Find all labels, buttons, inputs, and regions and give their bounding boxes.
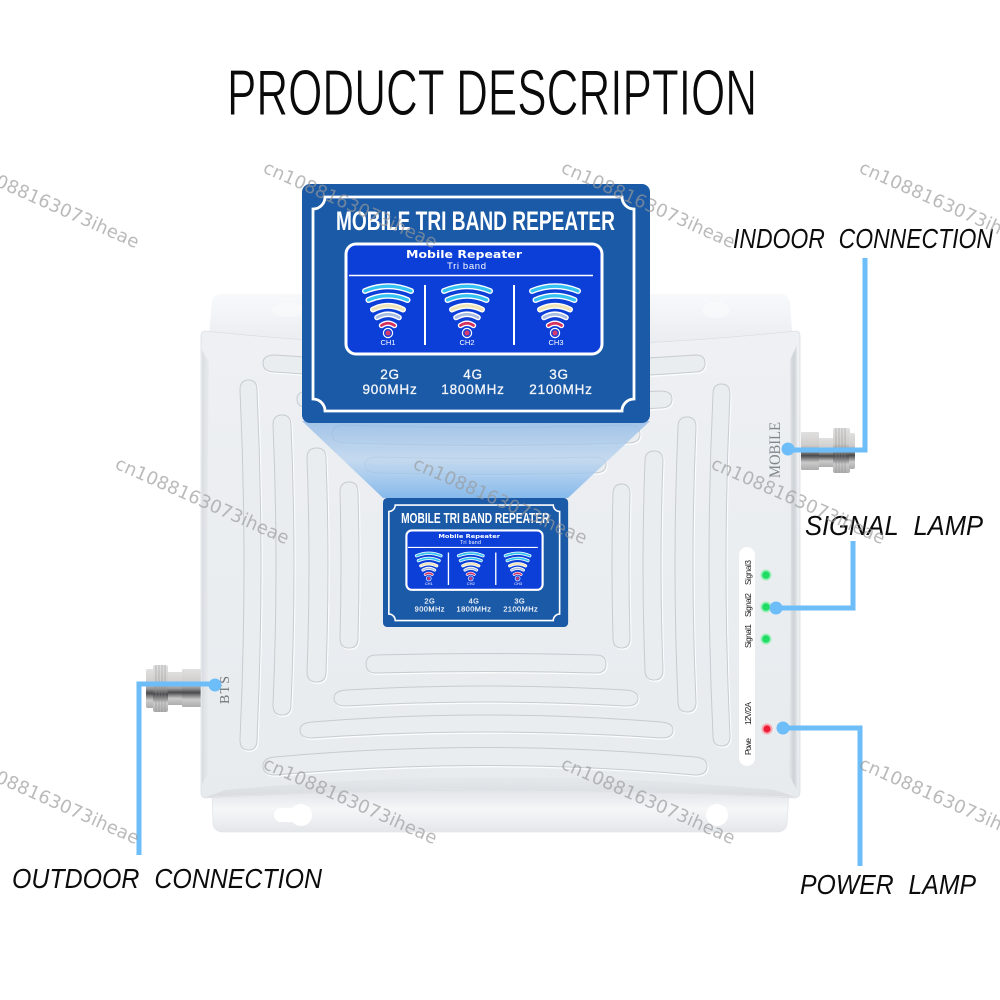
watermarks: cn1088163073iheae bbox=[260, 157, 440, 253]
signal icon: CH1 bbox=[365, 286, 411, 338]
callout: signal lamp bbox=[770, 510, 983, 614]
watermarks bbox=[0, 157, 1000, 849]
signal icon: CH2 bbox=[444, 286, 490, 338]
LCD panel: Mobile Repeater bbox=[406, 249, 523, 261]
LCD panel: CH1 bbox=[380, 338, 396, 347]
bottom mounting flange bbox=[212, 790, 789, 832]
LCD panel: Tri band bbox=[447, 261, 486, 272]
band frequencies: 900MHz bbox=[362, 382, 418, 397]
LED labels: Signal1 bbox=[744, 624, 753, 648]
device label card: Tri band bbox=[460, 540, 481, 546]
card heading: MOBILE TRI BAND REPEATER bbox=[336, 206, 615, 236]
watermarks: cn1088163073iheae bbox=[558, 157, 738, 253]
port label: MOBILE: MOBILE bbox=[767, 422, 784, 478]
band frequencies: 1800MHz bbox=[441, 382, 505, 397]
port label: BTS: BTS bbox=[218, 676, 233, 704]
device label card: 1800MHz bbox=[457, 604, 491, 613]
watermarks: cn1088163073iheae bbox=[708, 453, 888, 549]
LED labels: Signal2 bbox=[744, 593, 753, 617]
band frequencies: 2100MHz bbox=[529, 382, 593, 397]
LCD panel: CH3 bbox=[548, 338, 564, 347]
callout: outdoor connection bbox=[12, 678, 323, 894]
zoom beam between label cards bbox=[302, 421, 650, 498]
LCD panel: CH2 bbox=[459, 338, 475, 347]
side bevels bbox=[789, 345, 797, 790]
device label card: 4G bbox=[469, 596, 479, 605]
device label card: 2100MHz bbox=[503, 604, 538, 613]
band frequencies: 4G bbox=[463, 367, 483, 382]
enlarged label card bbox=[302, 184, 650, 423]
device label card: 2G bbox=[424, 596, 435, 605]
label: power lamp: POWER LAMP bbox=[800, 869, 976, 900]
watermarks: cn1088163073iheae bbox=[260, 753, 440, 849]
pressed ridges bbox=[240, 355, 731, 776]
LED labels: Signal3 bbox=[744, 560, 753, 585]
device label card: 3G bbox=[514, 596, 525, 605]
device label card: CH3 bbox=[514, 581, 523, 586]
device label card: Mobile Repeater bbox=[438, 534, 500, 540]
card frame bbox=[313, 197, 634, 411]
device label card bbox=[383, 498, 568, 627]
repeater device body bbox=[201, 294, 800, 832]
mounting holes bbox=[272, 302, 730, 826]
device label card: CH1 bbox=[425, 581, 433, 586]
main plate bbox=[201, 331, 800, 798]
device label card: MOBILE TRI BAND REPEATER bbox=[401, 511, 550, 527]
band frequencies: 3G bbox=[549, 367, 569, 382]
device label card: 900MHz bbox=[415, 604, 445, 613]
callout: power lamp bbox=[776, 722, 976, 900]
device label card: CH2 bbox=[467, 581, 476, 586]
label: outdoor connection: OUTDOOR CONNECTION bbox=[12, 863, 323, 894]
LCD panel bbox=[346, 244, 602, 354]
watermarks: cn1088163073iheae bbox=[558, 753, 738, 849]
connector: indoor bbox=[801, 428, 855, 473]
callout: indoor connection bbox=[733, 223, 994, 456]
watermarks: cn1088163073iheae bbox=[112, 453, 292, 549]
LED labels bbox=[744, 560, 753, 755]
label: signal lamp: SIGNAL LAMP bbox=[805, 510, 983, 541]
LED labels: Powe bbox=[744, 738, 753, 755]
LEDs bbox=[760, 570, 772, 734]
watermarks: cn1088163073iheae bbox=[410, 453, 590, 549]
title: PRODUCT DESCRIPTION bbox=[227, 56, 757, 129]
signal icon: CH3 bbox=[532, 286, 578, 338]
LED status panel bbox=[739, 547, 772, 766]
top mounting flange bbox=[208, 294, 793, 345]
LED labels: 12V/2A bbox=[744, 701, 753, 725]
connector: outdoor bbox=[146, 665, 201, 712]
band frequencies bbox=[362, 367, 593, 397]
band frequencies: 2G bbox=[380, 367, 400, 382]
